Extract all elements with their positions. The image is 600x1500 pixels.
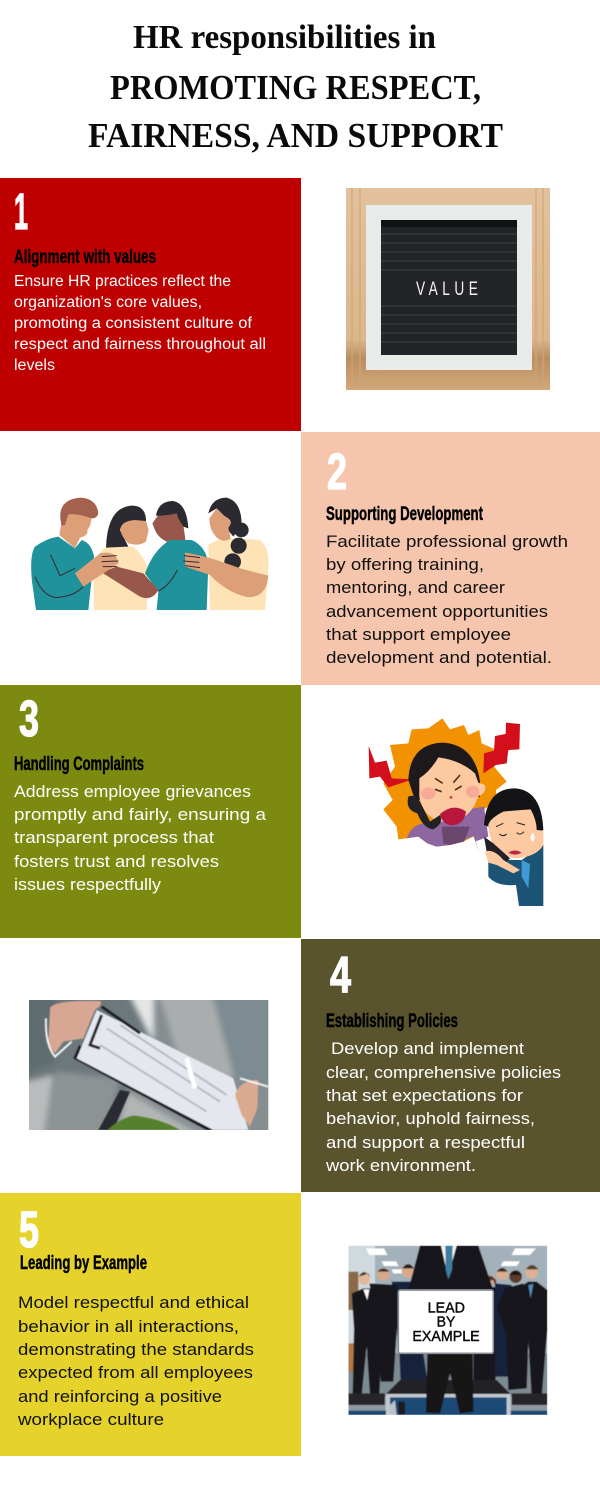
title (88, 19, 503, 155)
image: value letter board (346, 188, 550, 390)
body text 5: workplace culture (17, 1410, 164, 1429)
illustration: angry phone call (369, 718, 543, 906)
body text 2: that support employee (326, 625, 511, 644)
person: woman four (183, 498, 268, 597)
body text 2: mentoring, and career (326, 578, 505, 597)
body text 2: development and potential. (326, 648, 552, 667)
body text 3: transparent process that (14, 828, 214, 847)
body text 4: behavior, uphold fairness, (326, 1109, 535, 1128)
heading: leading by example: Leading by Example (20, 1252, 147, 1274)
body text 4: clear, comprehensive policies (326, 1063, 561, 1082)
panel: alignment with values: 1 (14, 183, 28, 240)
body text 3: fosters trust and resolves (14, 852, 219, 871)
angry woman (407, 743, 488, 852)
illustration: four people embracing (31, 498, 269, 610)
number 5: 5 (19, 1201, 39, 1258)
lightning right (483, 723, 520, 773)
body text 1: Ensure HR practices reflect the (14, 273, 231, 290)
body text 5: expected from all employees (18, 1363, 253, 1382)
burst (383, 718, 507, 847)
body text 4: Develop and implement (331, 1039, 524, 1058)
heading: handling complaints: Handling Complaints (14, 753, 144, 775)
body text 5: Model respectful and ethical (18, 1293, 249, 1312)
body text 1: organization's core values, (14, 294, 202, 311)
person: woman two head (106, 506, 149, 548)
lightning left (369, 746, 413, 787)
panel: supporting development (301, 432, 600, 685)
body text 1: levels (14, 357, 55, 374)
sign: lead by example: BY (437, 1315, 456, 1331)
body text 5: demonstrating the standards (18, 1340, 254, 1359)
worried man (484, 788, 543, 906)
body text 2: by offering training, (326, 555, 484, 574)
number 3: 3 (19, 690, 39, 747)
sign: lead by example: EXAMPLE (412, 1329, 480, 1345)
heading: establishing policies: Establishing Policies (326, 1010, 458, 1032)
body text 3: promptly and fairly, ensuring a (14, 805, 267, 824)
image: value letter board: VALUE (416, 278, 478, 300)
body text 5: behavior in all interactions, (18, 1317, 239, 1336)
sign: lead by example: LEAD (428, 1300, 465, 1316)
body text 3: Address employee grievances (14, 782, 251, 801)
body text 5: and reinforcing a positive (18, 1387, 222, 1406)
title: PROMOTING RESPECT, (110, 68, 481, 107)
photo: clipboard document (29, 1000, 268, 1130)
body text 2 (326, 532, 568, 667)
body text 3 (14, 782, 267, 894)
person: man three (102, 501, 208, 610)
sign: lead by example (398, 1290, 493, 1353)
body text 4: and support a respectful (326, 1133, 525, 1152)
body text 2: Facilitate professional growth (326, 532, 568, 551)
body text 1: promoting a consistent culture of (14, 315, 253, 332)
number 2: 2 (327, 443, 347, 500)
person: cream top left (93, 547, 148, 610)
body text 4: that set expectations for (326, 1086, 523, 1105)
body text 1: respect and fairness throughout all (14, 336, 266, 353)
body text 2: advancement opportunities (326, 602, 548, 621)
panel: alignment with values (0, 178, 301, 431)
heading: alignment with values: Alignment with values (14, 246, 156, 268)
title: FAIRNESS, AND SUPPORT (88, 116, 503, 155)
body text 4: work environment. (325, 1156, 476, 1175)
body text 3: issues respectfully (14, 875, 162, 894)
person: man one (31, 498, 118, 610)
body text 5 (17, 1293, 254, 1429)
heading: supporting development: Supporting Development (326, 503, 483, 525)
photo: lead by example team (348, 1246, 547, 1415)
number 4: 4 (330, 946, 351, 1003)
body text 4 (325, 1039, 561, 1175)
title: HR responsibilities in (133, 19, 436, 56)
body text 1 (14, 273, 266, 374)
panel: handling complaints (0, 685, 301, 938)
panel: leading by example (0, 1193, 301, 1456)
person: cream top right (208, 538, 269, 610)
panel: establishing policies (301, 939, 600, 1192)
